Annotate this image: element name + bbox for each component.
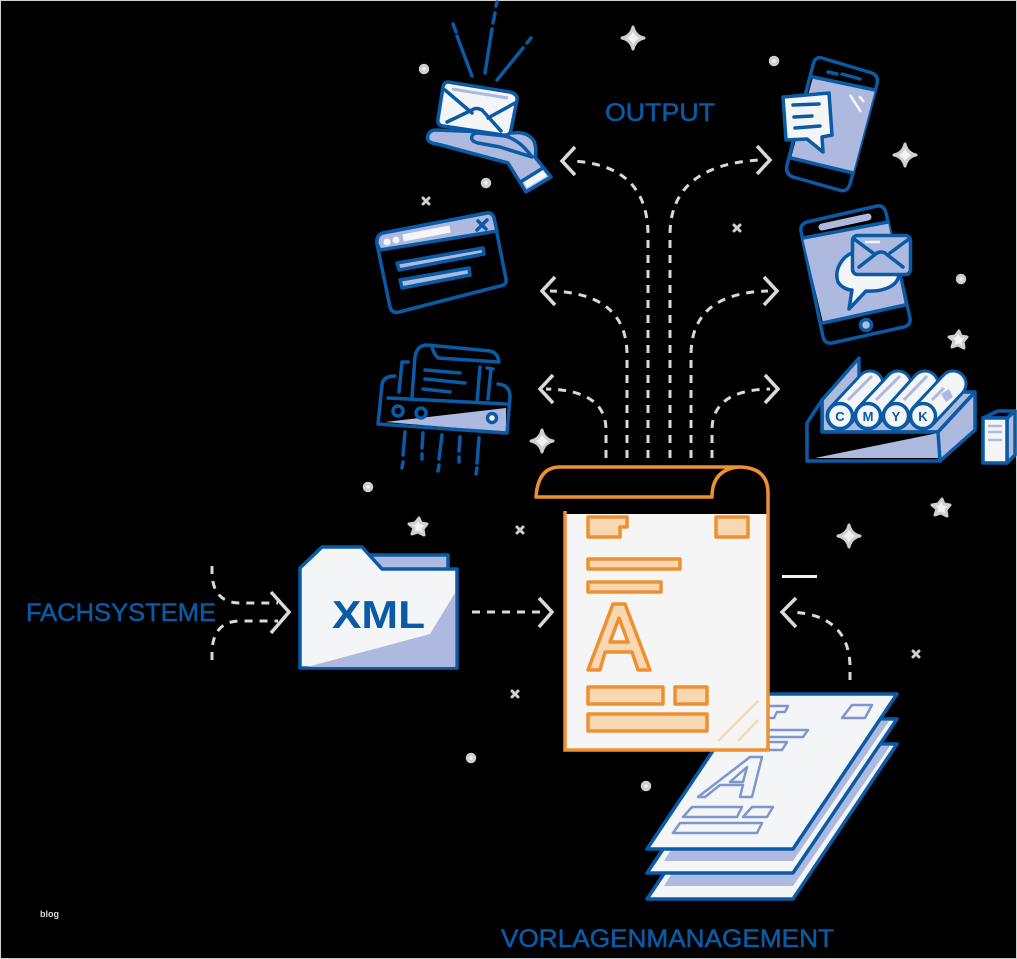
icon: cmyk cartridge tray: M	[863, 409, 873, 424]
sheet three	[647, 744, 897, 899]
decorative dots	[364, 58, 964, 790]
icon: phone with mail	[801, 206, 910, 343]
short white line	[782, 575, 817, 578]
lower bars	[588, 687, 707, 731]
roller c	[840, 376, 872, 416]
small label: blog: blog	[40, 909, 59, 919]
arrow xml to document	[472, 598, 552, 627]
decorative sparkles	[409, 27, 967, 547]
roller m	[868, 376, 900, 416]
icon: phone with chat bubble	[783, 58, 877, 191]
icon: cmyk cartridge tray: K	[918, 409, 928, 424]
heading: output: OUTPUT	[605, 99, 715, 127]
icon: cmyk cartridge tray: Y	[892, 409, 901, 424]
icon: cmyk cartridge tray	[807, 358, 975, 461]
icon: browser window	[377, 213, 506, 312]
icon: xml folder	[300, 547, 457, 668]
output arrows left	[540, 147, 648, 458]
roller k	[923, 384, 953, 416]
address block	[588, 517, 627, 537]
output arrows right	[670, 146, 778, 458]
input arrows from fachsysteme	[212, 566, 289, 660]
sheet one	[647, 694, 897, 849]
decorative crosses	[423, 198, 919, 697]
icon: cmyk cartridge tray: C	[835, 409, 845, 424]
icon: hand with envelope	[428, 2, 551, 192]
template stack	[647, 694, 897, 899]
roller y	[896, 376, 927, 416]
scroll top	[536, 467, 738, 497]
logo block	[716, 517, 748, 537]
xml label: XML	[332, 594, 425, 637]
heading: vorlagenmanagement: VORLAGENMANAGEMENT	[501, 925, 834, 953]
icon: small cartridge box	[983, 411, 1015, 463]
letter a	[588, 604, 650, 670]
icon: shredder printer	[378, 345, 510, 474]
arrow stack to document	[782, 598, 850, 680]
sheet two	[647, 719, 897, 873]
heading: fachsysteme: FACHSYSTEME	[26, 599, 216, 627]
text bars	[588, 559, 680, 592]
main template document	[536, 467, 768, 750]
